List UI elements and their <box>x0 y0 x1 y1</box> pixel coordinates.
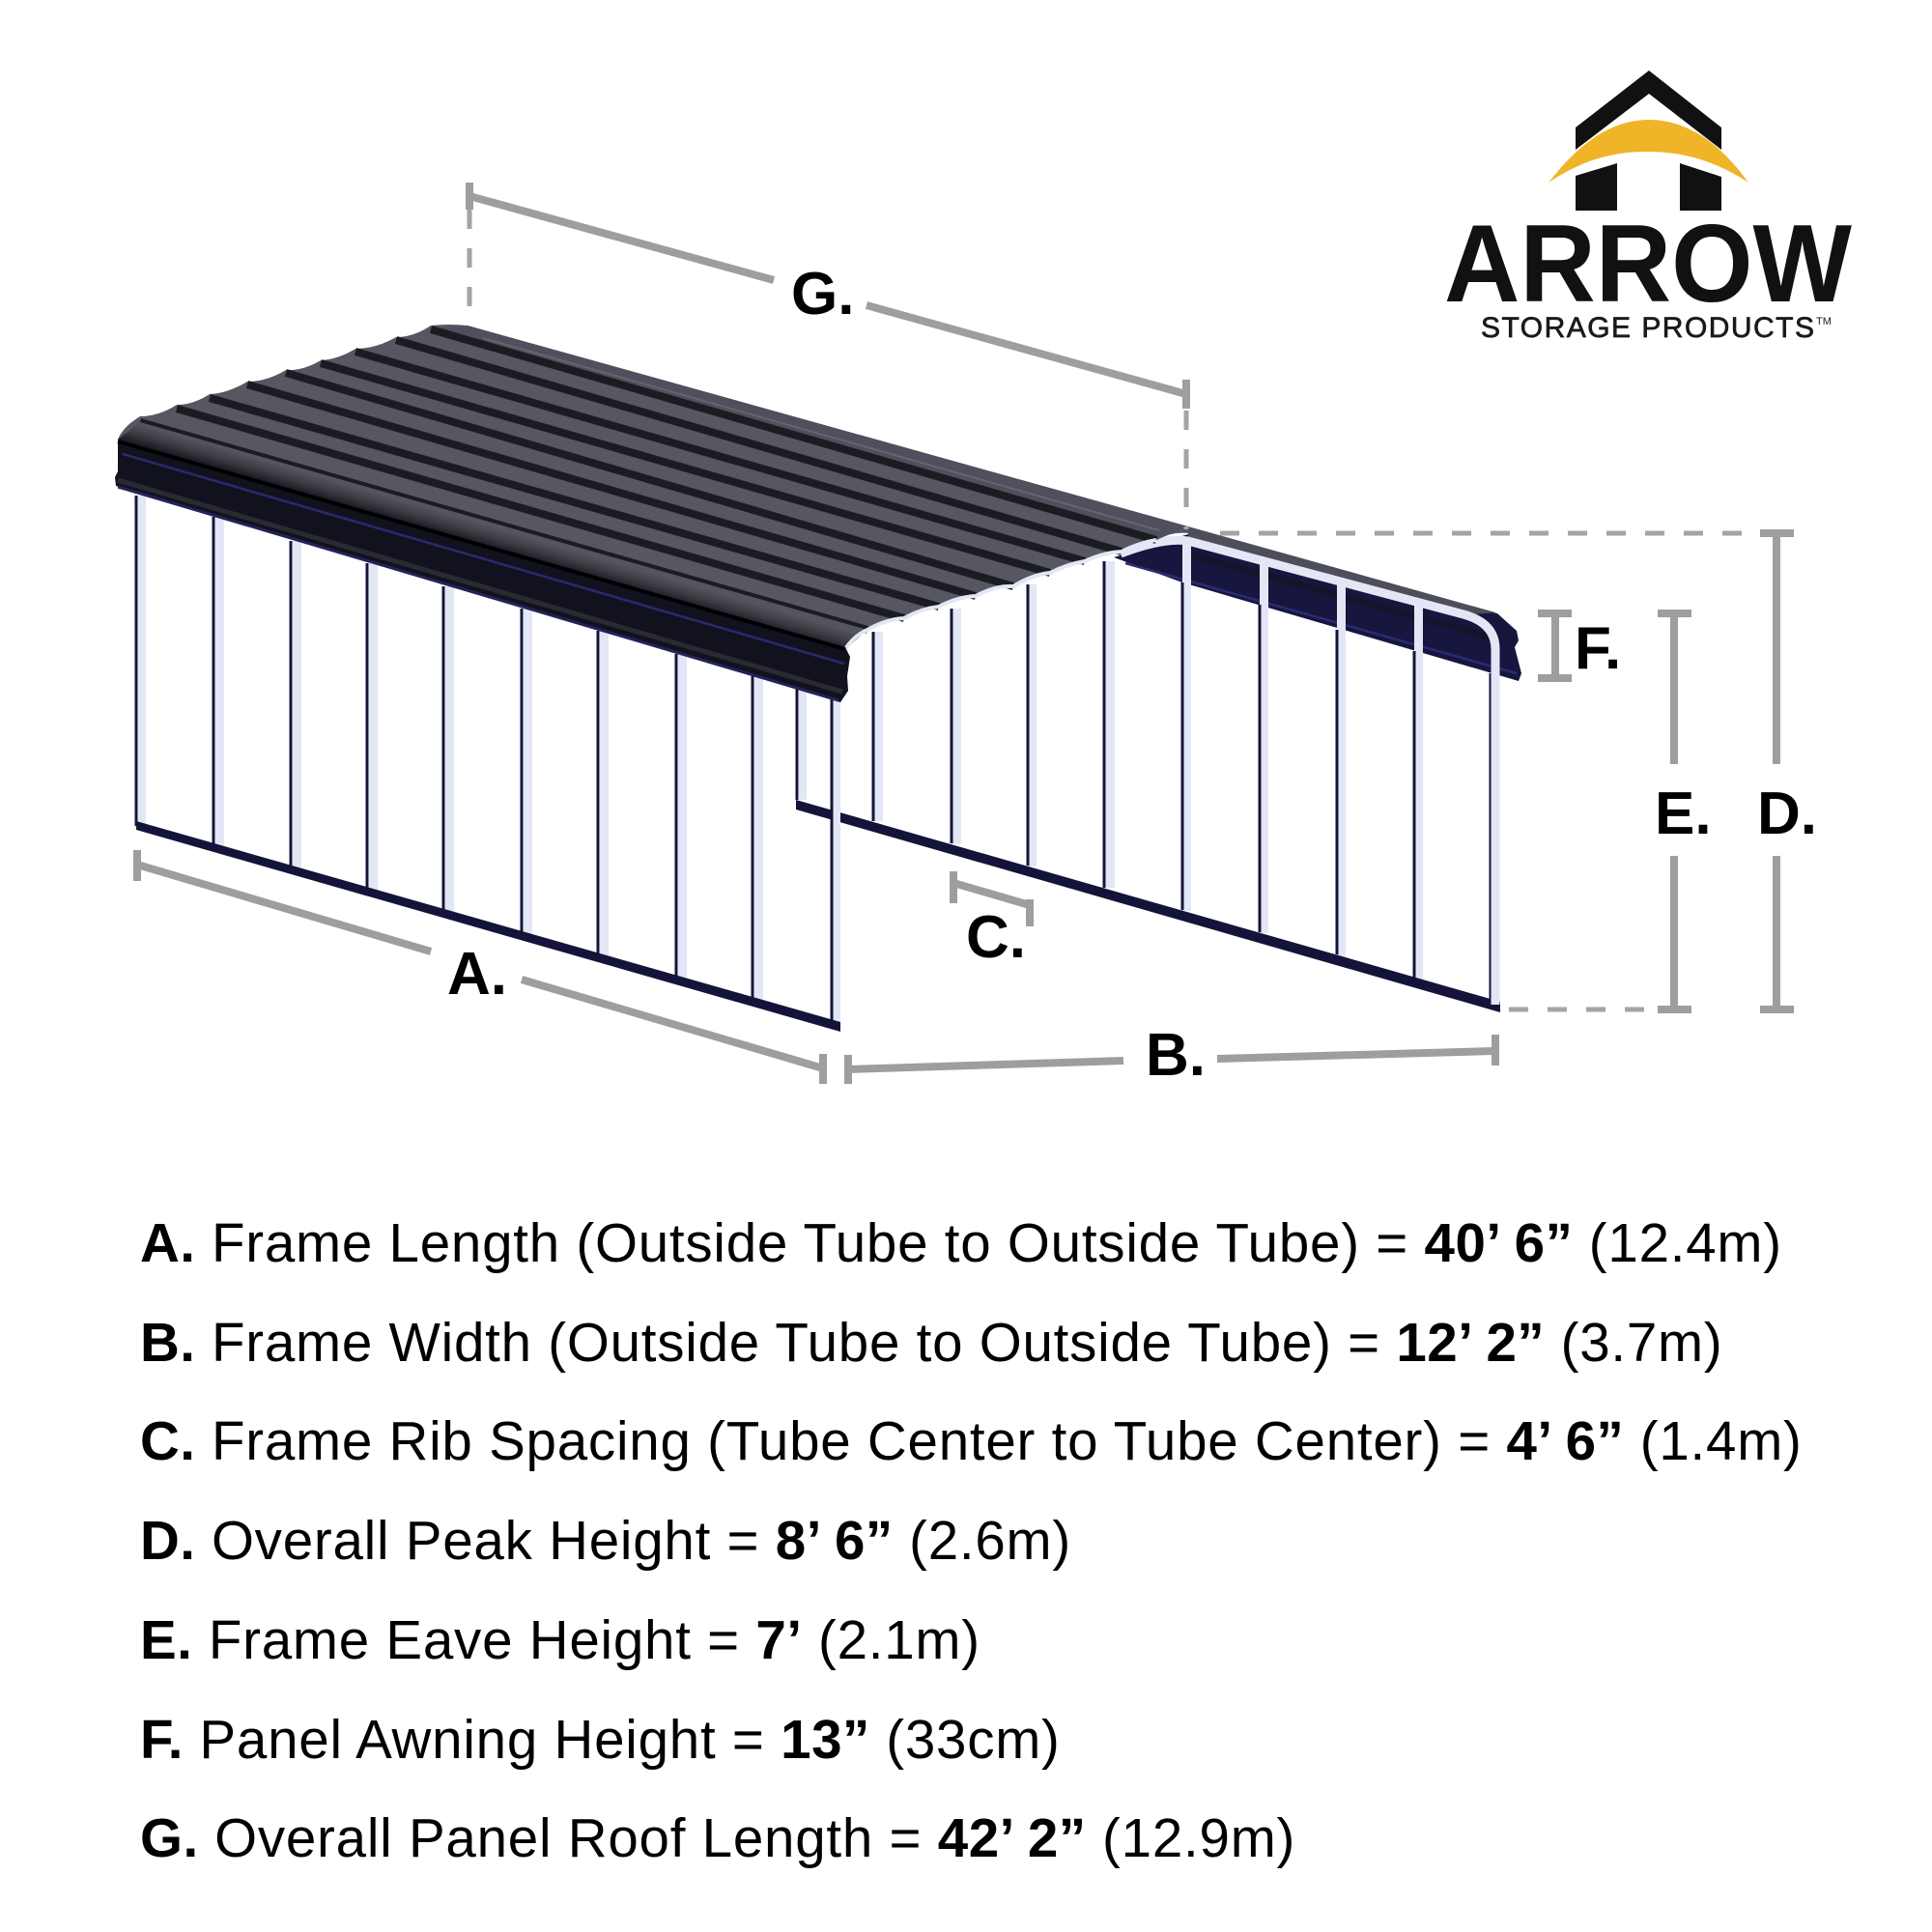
logo house walls <box>1576 163 1721 211</box>
logo wordmark: ARROW <box>1444 203 1852 326</box>
dimension E <box>1509 613 1712 1009</box>
spec B: B. Frame Width (Outside Tube to Outside Tube) = 12’ 2” (3.7m) <box>140 1312 1722 1373</box>
spec F: F. Panel Awning Height = 13” (33cm) <box>140 1709 1061 1770</box>
label D: D. <box>1757 781 1817 847</box>
logo tagline: STORAGE PRODUCTS <box>1481 312 1814 344</box>
right side frame <box>796 543 1500 1012</box>
logo house roof <box>1576 71 1721 150</box>
white arch frame <box>1121 540 1495 1005</box>
spec D: D. Overall Peak Height = 8’ 6” (2.6m) <box>140 1510 1071 1571</box>
awning underside <box>1114 526 1521 681</box>
specification list <box>140 1212 1803 1868</box>
label F: F. <box>1575 615 1621 682</box>
logo yellow arc <box>1548 120 1748 183</box>
dimension F <box>1538 613 1621 682</box>
roof ribs <box>140 329 1156 630</box>
dimension A <box>137 850 823 1084</box>
label A: A. <box>447 941 507 1008</box>
roof panel <box>118 325 1188 649</box>
label B: B. <box>1146 1022 1206 1089</box>
left side frame <box>136 496 840 1032</box>
dimension G <box>469 183 1186 529</box>
spec A: A. Frame Length (Outside Tube to Outside Tube) = 40’ 6” (12.4m) <box>140 1212 1782 1273</box>
logo <box>1444 71 1852 344</box>
scalloped white edge <box>845 540 1156 649</box>
dimension C <box>953 871 1030 971</box>
label C: C. <box>966 904 1026 971</box>
eave gradient <box>118 422 867 649</box>
spec C: C. Frame Rib Spacing (Tube Center to Tube Center) = 4’ 6” (1.4m) <box>140 1410 1803 1471</box>
dimension D <box>1220 533 1817 1009</box>
trademark: TM <box>1816 316 1832 327</box>
front fascia <box>115 440 850 702</box>
label G: G. <box>791 261 854 327</box>
label E: E. <box>1655 781 1712 847</box>
spec E: E. Frame Eave Height = 7’ (2.1m) <box>140 1609 980 1670</box>
dimension B <box>848 1022 1495 1089</box>
spec G: G. Overall Panel Roof Length = 42’ 2” (12.9m) <box>140 1807 1295 1868</box>
carport illustration <box>115 325 1521 1032</box>
